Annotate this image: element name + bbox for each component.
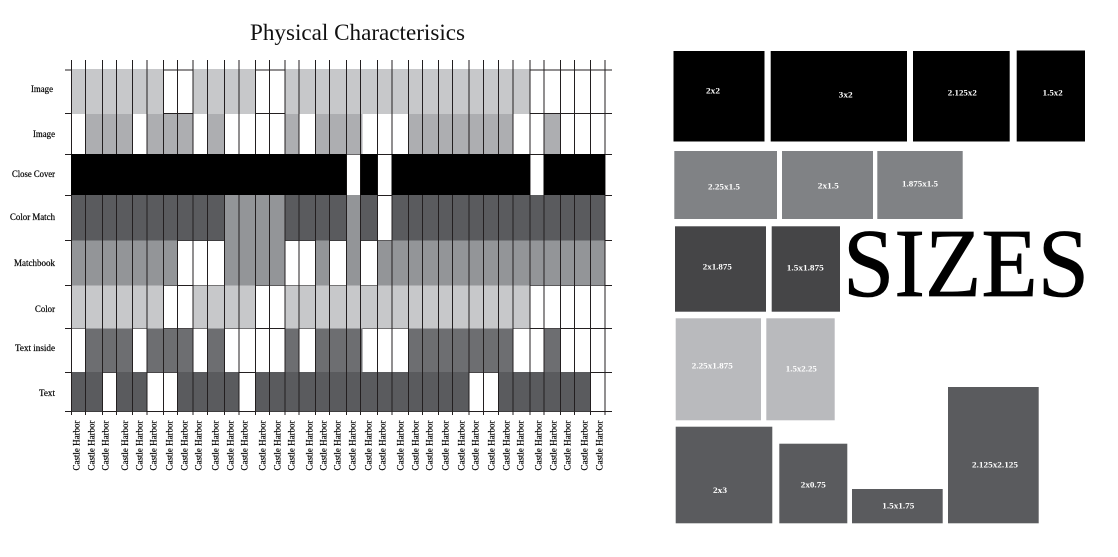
size block 2.125x2: 2.125x2 [948, 88, 977, 98]
column labels: Castle Harbor [503, 420, 513, 470]
size block 2x0.75 [779, 444, 847, 523]
row labels: Text [39, 388, 55, 398]
size block 1.5x1.75 [852, 489, 943, 523]
column labels: Castle Harbor [102, 420, 112, 470]
size block 2.25x1.875: 2.25x1.875 [692, 362, 733, 370]
size block 2.125x2 [913, 51, 1010, 142]
size block 1.5x2.25 [766, 318, 835, 420]
column labels: Castle Harbor [348, 420, 358, 470]
size block 2.25x1.875 [676, 318, 761, 420]
row labels: Matchbook [14, 258, 55, 268]
column labels: Castle Harbor [212, 420, 222, 470]
size block 2x1.875 [675, 226, 766, 312]
row bars: Image 1 [72, 69, 530, 114]
row labels: Color [35, 304, 55, 314]
row bars: Text inside [86, 328, 560, 372]
row bars: Text [72, 372, 590, 412]
size block 2.125x2.125 [948, 387, 1039, 523]
column labels: Castle Harbor [458, 420, 468, 470]
column labels: Castle Harbor [181, 420, 191, 470]
column labels: Castle Harbor [364, 420, 374, 470]
column labels: Castle Harbor [379, 420, 389, 470]
column labels: Castle Harbor [121, 420, 131, 470]
title: Physical Characterisics [250, 20, 465, 45]
column labels: Castle Harbor [241, 420, 251, 470]
size block 3x2: 3x2 [839, 90, 853, 100]
row labels: Close Cover [12, 169, 55, 179]
column labels: Castle Harbor [516, 420, 526, 470]
row bars: Color Match [72, 195, 605, 240]
size block 2x1.5 [782, 151, 873, 219]
size block 2x1.875: 2x1.875 [703, 262, 732, 272]
size block 2x2: 2x2 [706, 86, 720, 96]
column labels: Castle Harbor [305, 420, 315, 470]
row bars: Image 2 [86, 114, 560, 154]
column labels: Castle Harbor [534, 420, 544, 470]
column labels: Castle Harbor [136, 420, 146, 470]
size block 2x0.75: 2x0.75 [801, 480, 826, 490]
column labels: Castle Harbor [563, 420, 573, 470]
column labels: Castle Harbor [150, 420, 160, 470]
size block 2.125x2.125: 2.125x2.125 [972, 460, 1018, 470]
column labels: Castle Harbor [487, 420, 497, 470]
size block 1.5x1.75: 1.5x1.75 [882, 502, 914, 510]
column labels: Castle Harbor [472, 420, 482, 470]
size block 1.875x1.5 [877, 151, 963, 219]
size block 2x1.5: 2x1.5 [818, 182, 839, 190]
column labels: Castle Harbor [274, 420, 284, 470]
column labels: Castle Harbor [259, 420, 269, 470]
row labels: Image [33, 129, 55, 139]
size block 2x3 [676, 427, 772, 523]
column labels: Castle Harbor [166, 420, 176, 470]
size block 1.5x1.875: 1.5x1.875 [787, 264, 824, 272]
column labels [73, 420, 605, 470]
chart: physical characteristics matrix [65, 60, 612, 415]
column labels: Castle Harbor [441, 420, 451, 470]
column labels: Castle Harbor [595, 420, 605, 470]
column labels: Castle Harbor [549, 420, 559, 470]
row labels: Image [31, 84, 53, 94]
size block 1.875x1.5: 1.875x1.5 [902, 180, 938, 188]
column labels: Castle Harbor [320, 420, 330, 470]
column labels: Castle Harbor [73, 420, 83, 470]
column labels: Castle Harbor [194, 420, 204, 470]
column labels: Castle Harbor [226, 420, 236, 470]
row bars: Close Cover [71, 154, 605, 195]
row labels [10, 84, 55, 398]
size block 2x2 [674, 51, 764, 142]
size block 2x3: 2x3 [713, 486, 727, 495]
row bars: Color [72, 286, 530, 328]
row bars: Matchbook [72, 240, 605, 286]
size block 3x2 [771, 51, 907, 142]
heading: SIZES: SIZES [843, 210, 1089, 317]
row labels: Color Match [10, 212, 55, 222]
size block 1.5x1.875 [772, 226, 840, 312]
column labels: Castle Harbor [88, 420, 98, 470]
column labels: Castle Harbor [334, 420, 344, 470]
size block 2.25x1.5 [674, 151, 777, 219]
column labels: Castle Harbor [581, 420, 591, 470]
size block 1.5x2 [1017, 50, 1085, 142]
column labels: Castle Harbor [412, 420, 422, 470]
size block 1.5x2: 1.5x2 [1043, 88, 1063, 98]
row labels: Text inside [15, 343, 55, 353]
column labels: Castle Harbor [288, 420, 298, 470]
size block 2.25x1.5: 2.25x1.5 [708, 182, 740, 192]
column labels: Castle Harbor [426, 420, 436, 470]
size block 1.5x2.25: 1.5x2.25 [786, 364, 817, 374]
column labels: Castle Harbor [397, 420, 407, 470]
